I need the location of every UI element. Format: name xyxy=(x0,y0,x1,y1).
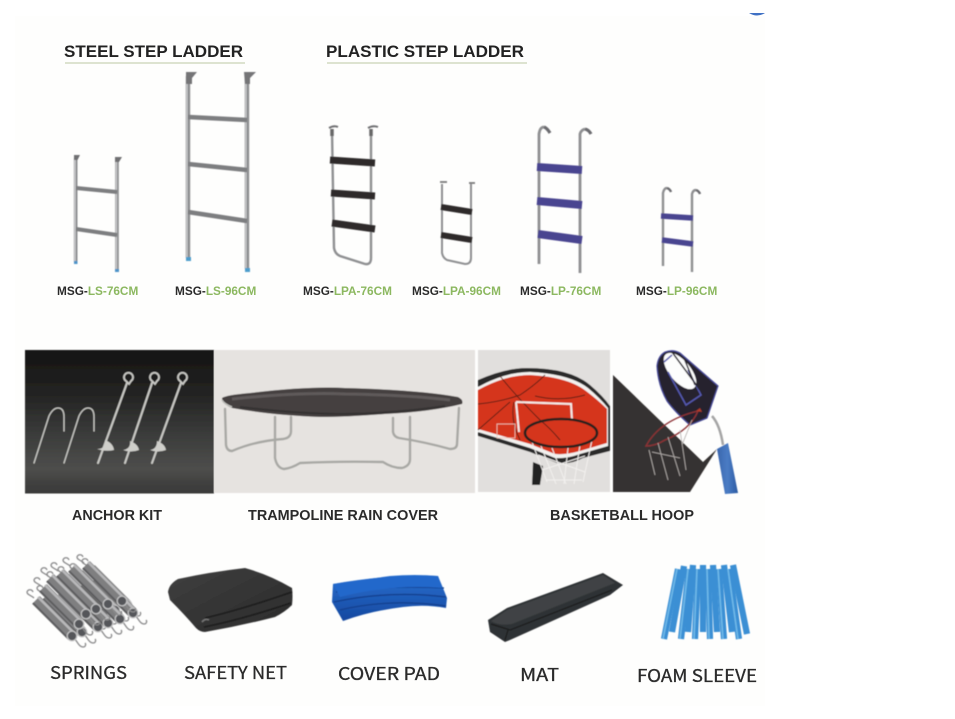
item: mat xyxy=(488,573,623,687)
heading: plastic step ladder: PLASTIC STEP LADDER xyxy=(326,42,524,61)
ladder: LPA-76 xyxy=(329,126,378,264)
blue crescent fragment xyxy=(749,13,765,16)
ladder: LP-76 xyxy=(537,127,591,273)
ladder: LP-96 xyxy=(661,188,700,272)
icon: folded net xyxy=(168,568,292,632)
photo: hoop mounted on net xyxy=(613,347,738,494)
label: mat: MAT xyxy=(520,662,559,687)
photo: hoop backboard xyxy=(478,350,610,492)
panel: steel step ladders xyxy=(57,42,256,298)
photo: anchor kit xyxy=(25,350,214,494)
item: safety net xyxy=(168,568,292,685)
panel: plastic step ladders xyxy=(303,42,717,298)
icon: folded black mat xyxy=(488,573,623,642)
photo: trampoline with cover xyxy=(214,350,475,493)
ladder: LPA-96 xyxy=(440,182,475,264)
label: springs: SPRINGS xyxy=(50,660,127,685)
icon: blue foam tubes xyxy=(663,565,747,639)
label: MSG-LS-96CM: MSG-LS-96CM xyxy=(175,284,256,298)
heading underline xyxy=(327,62,527,64)
heading: steel step ladder: STEEL STEP LADDER xyxy=(64,42,243,61)
panel: basketball hoop xyxy=(478,347,738,524)
label: MSG-LP-76CM: MSG-LP-76CM xyxy=(520,284,601,298)
item: springs xyxy=(27,555,147,685)
label: anchor kit: ANCHOR KIT xyxy=(72,508,162,524)
label: MSG-LPA-96CM: MSG-LPA-96CM xyxy=(412,284,501,298)
label: MSG-LP-96CM: MSG-LP-96CM xyxy=(636,284,717,298)
label: trampoline rain cover: TRAMPOLINE RAIN COVER xyxy=(248,508,439,524)
image background xyxy=(15,16,765,706)
ladder: LS-76 xyxy=(74,155,122,272)
label: foam sleeve: FOAM SLEEVE xyxy=(637,663,757,688)
label: MSG-LS-76CM: MSG-LS-76CM xyxy=(57,284,138,298)
item: foam sleeve xyxy=(637,565,757,688)
label: safety net: SAFETY NET xyxy=(184,660,287,685)
panel: trampoline rain cover xyxy=(214,350,475,524)
panel: anchor kit xyxy=(25,350,214,524)
label: cover pad: COVER PAD xyxy=(338,661,440,686)
item: cover pad xyxy=(332,575,447,686)
label: MSG-LPA-76CM: MSG-LPA-76CM xyxy=(303,284,392,298)
icon: stacked blue pad xyxy=(332,575,447,621)
label: basketball hoop: BASKETBALL HOOP xyxy=(550,508,694,524)
icon: springs bundle xyxy=(27,555,147,647)
ladder: LS-96 xyxy=(186,72,256,272)
heading underline xyxy=(65,62,245,64)
